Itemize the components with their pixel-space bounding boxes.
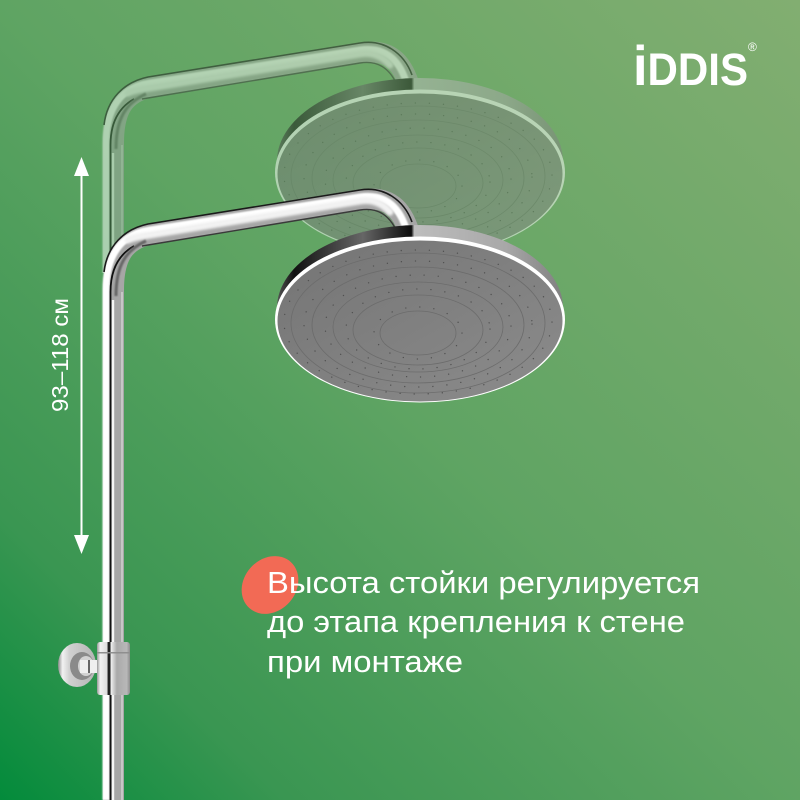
caption: Высота стойки регулируется: [267, 565, 700, 600]
height label: 93–118 см: [47, 298, 73, 412]
mount plate: [58, 643, 96, 687]
mount nut: [70, 652, 94, 680]
height dimension arrow: [74, 157, 89, 554]
shower arm and riser pipe: [104, 189, 412, 800]
ghost head: [275, 78, 565, 256]
shower head: [275, 225, 565, 402]
caption: [267, 565, 700, 679]
caption: до этапа крепления к стене: [267, 604, 685, 639]
ghost shower arm and head: raised position: [104, 42, 565, 653]
registered mark: ®: [748, 40, 757, 54]
mount connector: [80, 660, 98, 673]
sliding clamp: [97, 642, 130, 695]
caption: при монтаже: [267, 644, 463, 679]
ghost arm pipe: [102, 42, 418, 273]
logo: iDDIS: [633, 34, 748, 97]
accent blob: [230, 545, 310, 625]
wall mount bracket: [58, 643, 98, 687]
